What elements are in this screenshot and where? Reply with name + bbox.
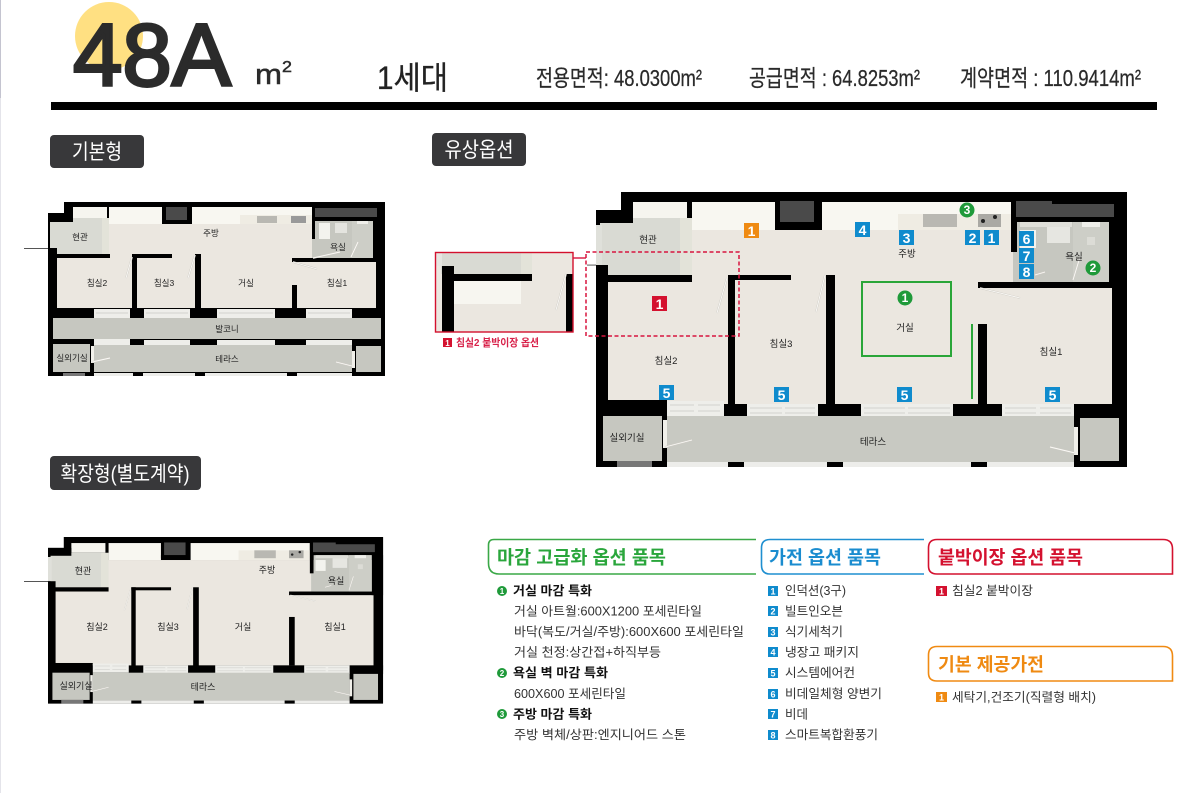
- room labels: paid options: 침실2: [655, 356, 677, 367]
- heading: built-in closet options: [928, 540, 1172, 574]
- tag: paid options: 유상옵션: [444, 139, 514, 162]
- list: appliances: 식기세척기: [785, 625, 843, 639]
- list: living room: 바닥(복도/거실/주방):600X600 포세린타일: [514, 625, 744, 639]
- unit: square metres: 2: [282, 59, 292, 76]
- unit: square metres: m: [255, 59, 279, 91]
- tag: basic type: [50, 135, 144, 168]
- list: appliances: 7: [770, 710, 776, 720]
- title: 48A: 48A: [73, 6, 231, 104]
- list: living room: 거실 아트월:600X1200 포세린타일: [514, 604, 702, 618]
- room labels: basic type: 테라스: [215, 354, 239, 364]
- list: appliances: 냉장고 패키지: [785, 646, 859, 660]
- blue markers: 5: [778, 387, 786, 403]
- red marker: 1: [656, 296, 664, 312]
- room labels: paid options: 실외기실: [610, 432, 644, 444]
- list: living room: 거실 마감 특화: [513, 583, 593, 598]
- room labels: paid options: 주방: [898, 249, 916, 260]
- list: built-in closet: 1: [939, 586, 944, 596]
- blue markers: 1: [988, 230, 996, 246]
- floor plan: paid options: [586, 192, 1127, 467]
- blue markers: 4: [859, 222, 867, 238]
- dashed option area: [586, 252, 739, 336]
- list: living room: [497, 583, 744, 660]
- blue markers: 3: [903, 230, 911, 246]
- supply area: 공급면적 : 64.8253m²: [749, 65, 920, 91]
- header rule: [51, 102, 1157, 110]
- blue markers: 2: [969, 230, 977, 246]
- tag: extended type: 확장형(별도계약): [60, 463, 190, 486]
- green markers: [898, 202, 1100, 306]
- floor plan: extended type: [24, 537, 383, 704]
- option inset: [436, 252, 586, 332]
- room labels: paid options: 거실: [896, 323, 914, 334]
- room labels: paid options: 현관: [639, 235, 657, 246]
- blue markers: 7: [1023, 248, 1031, 264]
- green markers: 3: [964, 203, 971, 217]
- blue markers: [659, 222, 1060, 403]
- list: appliances: 4: [770, 648, 776, 658]
- room labels: paid options: 침실3: [770, 339, 792, 350]
- list: kitchen: 주방 마감 특화: [513, 706, 593, 722]
- room labels: basic type: 주방: [203, 228, 219, 238]
- heading: standard appliances: [928, 646, 1172, 681]
- room labels: basic type: [56, 228, 347, 364]
- room labels: extended type: 주방: [259, 565, 275, 575]
- panel: finish options: [488, 540, 756, 742]
- blue markers: 5: [901, 387, 909, 403]
- list: appliances: 비데일체형 양변기: [785, 687, 882, 701]
- green markers: 2: [1090, 261, 1097, 275]
- tag: paid options: [432, 133, 526, 166]
- list: appliances: 비데: [785, 708, 808, 722]
- finish area: living room wall: [862, 282, 951, 356]
- heading: appliance options: 가전 옵션 품목: [769, 547, 881, 568]
- orange marker: 1: [748, 223, 756, 239]
- room labels: paid options: 침실1: [1040, 347, 1062, 358]
- list: appliances: 빌트인오븐: [785, 604, 843, 618]
- room labels: extended type: 테라스: [191, 682, 215, 692]
- orange marker: [744, 223, 759, 239]
- tag: basic type: 기본형: [72, 141, 122, 164]
- list: bathroom: 2: [500, 669, 505, 678]
- list: built-in closet: 침실2 붙박이장: [952, 584, 1033, 598]
- list: appliances: 2: [770, 606, 776, 616]
- heading: standard appliances: 기본 제공가전: [938, 654, 1044, 675]
- room labels: basic type: 침실2: [87, 278, 107, 288]
- blue markers: 6: [1023, 231, 1031, 247]
- list: appliances: 8: [770, 730, 776, 740]
- list: appliances: 5: [770, 668, 776, 678]
- list: bathroom: [497, 665, 626, 701]
- yellow circle: [75, 2, 143, 70]
- room labels: extended type: [59, 565, 346, 692]
- blue markers: 8: [1023, 264, 1031, 280]
- room labels: extended type: 침실2: [86, 622, 108, 632]
- exclusive area: 전용면적: 48.0300m²: [536, 65, 702, 91]
- inset caption: 1: [445, 339, 450, 348]
- list: appliances: 1: [770, 586, 776, 596]
- household count: 1세대: [377, 60, 448, 96]
- blue markers: 5: [1049, 387, 1057, 403]
- blue markers: 5: [663, 385, 671, 401]
- list: appliances: 6: [770, 690, 776, 700]
- heading: built-in closet options: 붙박이장 옵션 품목: [938, 547, 1083, 568]
- room labels: basic type: 침실1: [327, 278, 347, 288]
- room labels: basic type: 욕실: [330, 242, 346, 252]
- room labels: basic type: 현관: [72, 232, 88, 242]
- room labels: basic type: 거실: [238, 278, 254, 288]
- list: appliances: 인덕션(3구): [785, 584, 846, 598]
- heading: finish options: 마감 고급화 옵션 품목: [497, 547, 666, 568]
- floor plan: basic type: [24, 202, 385, 376]
- list: appliances: 시스템에어컨: [785, 666, 855, 680]
- panel: appliance options: [762, 540, 924, 742]
- room labels: basic type: 실외기실: [56, 353, 88, 363]
- list: appliances: [768, 584, 882, 742]
- list: standard appliances: 세탁기,건조기(직렬형 배치): [952, 690, 1096, 704]
- green markers: 1: [902, 291, 909, 305]
- room labels: basic type: 침실3: [154, 278, 174, 288]
- room labels: extended type: 거실: [235, 622, 251, 632]
- room labels: basic type: 발코니: [215, 324, 239, 334]
- contract area: 계약면적 : 110.9414m²: [960, 65, 1141, 91]
- panel: built-in closet options: [928, 540, 1172, 598]
- list: standard appliances: 1: [939, 692, 944, 702]
- room labels: paid options: 테라스: [860, 437, 886, 448]
- list: bathroom: 600X600 포세린타일: [514, 687, 626, 701]
- room labels: extended type: 욕실: [328, 576, 344, 586]
- list: living room: 거실 천정:상간접+하직부등: [514, 644, 661, 660]
- heading: appliance options: [762, 540, 924, 574]
- tag: extended type: [50, 456, 201, 490]
- list: kitchen: 주방 벽체/상판:엔지니어드 스톤: [514, 728, 686, 742]
- heading: finish options: [488, 540, 756, 574]
- red marker: [652, 296, 667, 312]
- room labels: extended type: 침실3: [157, 622, 179, 632]
- room labels: paid options: [610, 235, 1083, 448]
- panel: standard appliances: [928, 646, 1172, 704]
- finish line: art wall: [971, 324, 973, 399]
- room labels: extended type: 침실1: [324, 622, 346, 632]
- list: living room: 1: [500, 587, 505, 596]
- list: bathroom: 욕실 벽 마감 특화: [513, 665, 609, 680]
- list: kitchen: 3: [500, 710, 505, 719]
- list: appliances: 스마트복합환풍기: [785, 728, 878, 742]
- room labels: extended type: 현관: [75, 566, 91, 576]
- inset caption: 침실2 붙박이장 옵션: [456, 336, 539, 349]
- list: appliances: 3: [770, 628, 776, 638]
- room labels: extended type: 실외기실: [59, 680, 93, 691]
- list: kitchen: [497, 706, 686, 742]
- room labels: paid options: 욕실: [1065, 252, 1083, 263]
